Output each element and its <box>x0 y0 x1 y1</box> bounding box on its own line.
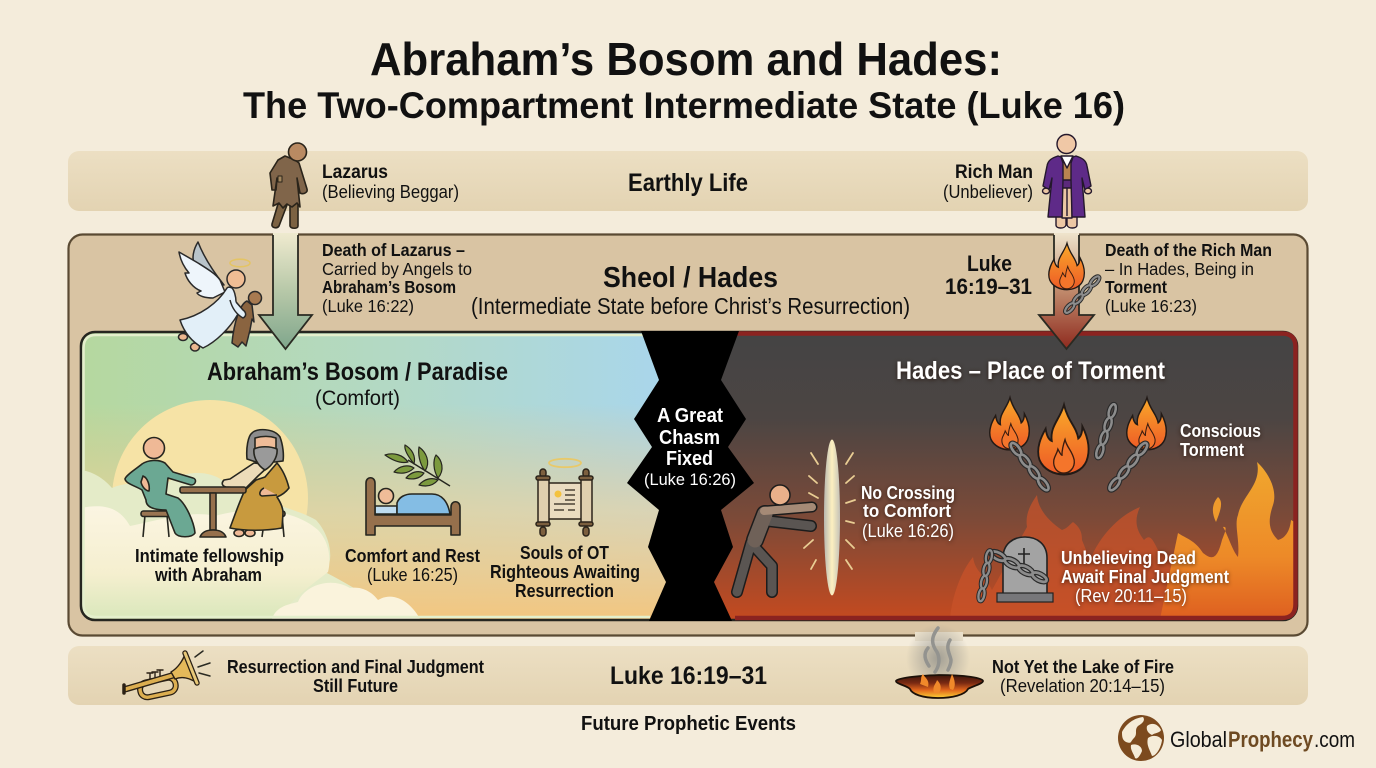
heading: sheol / hades: (Intermediate State before Christ’s Resurrection) <box>471 293 910 319</box>
text: conscious torment <box>1180 421 1261 460</box>
text: death of lazarus: Death of Lazarus – <box>322 240 465 260</box>
text: unbelieving dead: (Rev 20:11–15) <box>1075 586 1187 606</box>
icon: fellowship with abraham <box>125 430 289 537</box>
text: lazarus label: Lazarus <box>322 162 388 183</box>
arrow: rich man death <box>1039 233 1094 349</box>
panel: hades background <box>690 332 1300 619</box>
heading: hades place of torment: Hades – Place of Torment <box>896 357 1166 385</box>
text: intimate fellowship: Intimate fellowship <box>135 546 284 566</box>
title: Abraham’s Bosom and Hades: <box>370 33 1002 85</box>
icon: lake of fire <box>896 624 983 698</box>
text: death of rich man <box>1105 240 1272 316</box>
text: unbelieving dead: Unbelieving Dead <box>1061 548 1196 568</box>
icon: scroll with halo <box>536 459 593 536</box>
text: death of rich man: – In Hades, Being in <box>1105 259 1254 279</box>
text: conscious torment: Conscious <box>1180 421 1261 441</box>
panel: future events bar <box>68 646 1308 705</box>
text: luke reference footer: Luke 16:19–31 <box>610 662 767 690</box>
text: lazarus label <box>322 162 459 202</box>
text: website brand: Prophecy <box>1228 727 1314 752</box>
icon: lazarus beggar <box>270 143 307 228</box>
text: luke reference <box>945 251 1032 299</box>
text: comfort and rest: (Luke 16:25) <box>367 565 458 585</box>
left panel outline <box>81 332 1297 620</box>
heading: earthly life: Earthly Life <box>628 169 748 197</box>
heading: abraham's bosom: (Comfort) <box>315 387 400 410</box>
text: great chasm: Fixed <box>666 448 713 470</box>
text: great chasm: A Great <box>657 405 723 427</box>
text: no crossing: No Crossing <box>861 483 955 503</box>
icon: tombstone and chain <box>977 537 1053 602</box>
icon: chain on arrow <box>1064 275 1101 314</box>
text: souls of ot: Righteous Awaiting <box>490 562 640 582</box>
chasm <box>627 331 754 621</box>
heading: sheol / hades: Sheol / Hades <box>603 262 778 294</box>
text: lake of fire <box>992 657 1174 696</box>
heading: abraham's bosom <box>207 358 508 410</box>
text: no crossing: (Luke 16:26) <box>862 521 954 541</box>
icon: rich man <box>1042 134 1092 228</box>
text: lake of fire: Not Yet the Lake of Fire <box>992 657 1174 677</box>
panel: abraham's bosom background <box>81 332 721 619</box>
text: website brand <box>1170 727 1355 752</box>
text: intimate fellowship <box>135 546 284 585</box>
panel: earthly life bar <box>68 151 1308 211</box>
title <box>243 33 1125 126</box>
text: resurrection still future <box>227 657 484 696</box>
text: death of lazarus <box>322 240 472 316</box>
text: no crossing <box>861 483 955 541</box>
text: death of rich man: (Luke 16:23) <box>1105 296 1197 316</box>
text: lake of fire: (Revelation 20:14–15) <box>1000 676 1165 696</box>
icon: angel carrying lazarus <box>178 242 262 351</box>
icon: trumpet <box>124 651 210 699</box>
icon: man pushing <box>737 485 812 592</box>
text: resurrection still future: Still Future <box>313 676 398 696</box>
text: website brand: Global <box>1170 727 1227 752</box>
text: unbelieving dead <box>1061 548 1229 606</box>
text: lazarus label: (Believing Beggar) <box>322 182 459 202</box>
heading: abraham's bosom: Abraham’s Bosom / Paradise <box>207 358 508 386</box>
icon: barrier <box>804 440 855 596</box>
right panel outline <box>735 334 1296 618</box>
text: rich man label <box>943 162 1033 202</box>
text: website brand: .com <box>1314 727 1355 752</box>
icon: flame on arrow <box>1049 243 1084 290</box>
text: conscious torment: Torment <box>1180 440 1244 460</box>
text: comfort and rest <box>345 546 480 585</box>
text: luke reference: 16:19–31 <box>945 274 1032 299</box>
icon: globe logo <box>1118 715 1164 761</box>
panel: sheol / hades <box>68 234 1308 636</box>
title: The Two-Compartment Intermediate State (Luke 16) <box>243 85 1125 126</box>
text: luke reference: Luke <box>967 251 1012 276</box>
text: death of lazarus: Carried by Angels to <box>322 259 472 279</box>
text: death of lazarus: (Luke 16:22) <box>322 296 414 316</box>
heading: sheol / hades <box>471 262 910 319</box>
text: rich man label: Rich Man <box>955 162 1033 183</box>
text: intimate fellowship: with Abraham <box>154 565 262 585</box>
text: death of rich man: Torment <box>1105 277 1167 297</box>
text: great chasm: (Luke 16:26) <box>644 470 736 489</box>
text: no crossing: to Comfort <box>863 501 951 521</box>
text: future prophetic events: Future Prophetic Events <box>581 713 796 735</box>
text: death of lazarus: Abraham’s Bosom <box>322 277 456 297</box>
arrow: lazarus death <box>259 233 312 349</box>
text: unbelieving dead: Await Final Judgment <box>1061 567 1229 587</box>
text: souls of ot: Souls of OT <box>520 543 609 563</box>
text: souls of ot <box>490 543 640 601</box>
icon: bed with branch <box>366 445 460 535</box>
icon: flames and chains <box>990 398 1166 492</box>
panel: inner compartments <box>81 331 1300 621</box>
text: great chasm <box>644 405 736 489</box>
text: great chasm: Chasm <box>659 427 720 449</box>
text: comfort and rest: Comfort and Rest <box>345 546 480 566</box>
text: souls of ot: Resurrection <box>515 581 614 601</box>
text: resurrection still future: Resurrection and Final Judgment <box>227 657 484 677</box>
text: death of rich man: Death of the Rich Man <box>1105 240 1272 260</box>
text: rich man label: (Unbeliever) <box>943 182 1033 202</box>
